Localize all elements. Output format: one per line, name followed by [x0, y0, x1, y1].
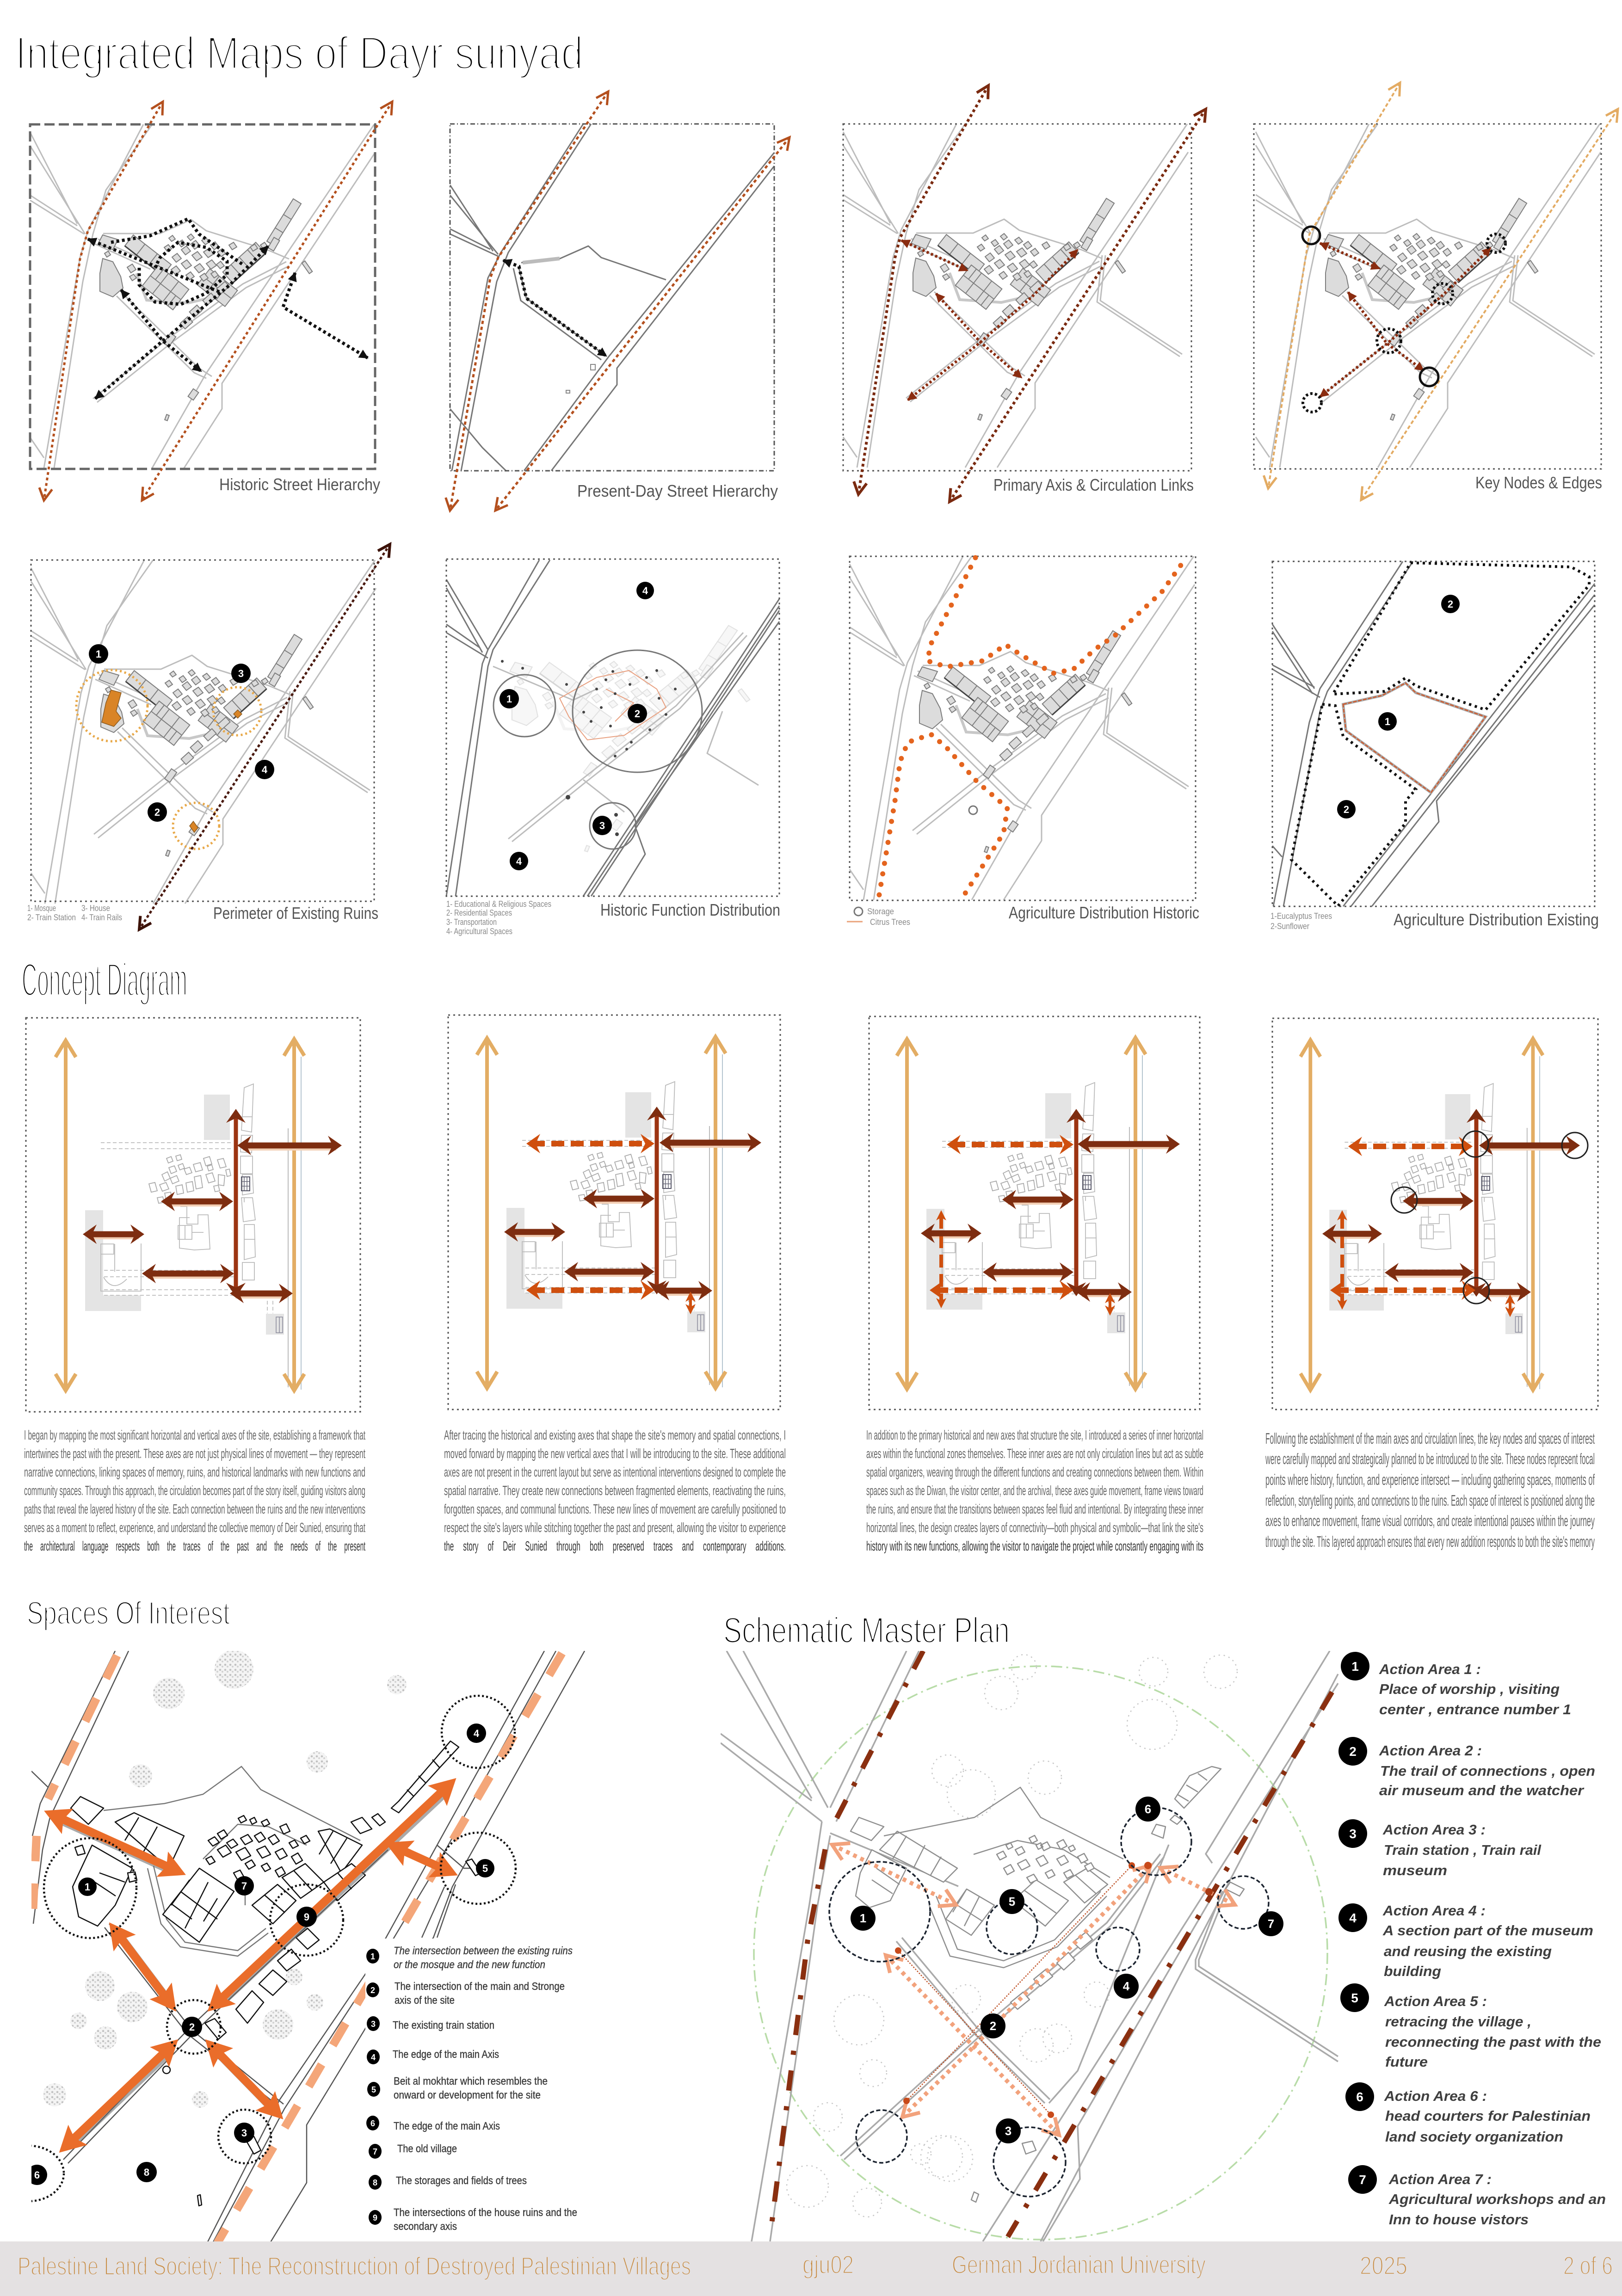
- text block: concept 4: [1265, 1430, 1595, 1550]
- roads: [31, 1651, 585, 2243]
- legend: spaces of interest: The edge of the main Axis: [394, 2120, 500, 2132]
- action area 3: Action Area 3 :: [1382, 1822, 1486, 1838]
- caption: Historic Function Distribution: [600, 900, 780, 919]
- ruins highlighted: [102, 690, 242, 832]
- buildings: [71, 1741, 481, 2206]
- legend: spaces of interest: 4: [371, 2053, 376, 2062]
- panel: schematic master plan map: [721, 1651, 1338, 2241]
- action area 3: [1338, 1819, 1542, 1878]
- action area 6: head courters for Palestinian: [1385, 2108, 1591, 2124]
- number badges: 1: [1385, 716, 1390, 727]
- panel: agriculture distribution existing: [1270, 561, 1599, 931]
- legend: action areas: [1338, 1652, 1606, 2228]
- orange rail dashes: [32, 1653, 562, 2243]
- action area 3: 3: [1349, 1827, 1357, 1841]
- text block: concept 1: I began by mapping the most significant horizontal and vertical axes of the site, establishing a framework that: [24, 1428, 365, 1443]
- circulation dotted paths: [88, 219, 368, 399]
- text block: concept 2: the story of Deir Sunied through both preserved traces and contemporary additions.: [444, 1539, 786, 1554]
- number badges: 7: [1268, 1917, 1274, 1931]
- legend: spaces of interest: 5: [371, 2085, 376, 2094]
- number badges: 6: [34, 2169, 40, 2181]
- text block: concept 1: community spaces. Through this approach, the circulation becomes part of the story itself, guiding visitors along: [24, 1483, 365, 1498]
- number badges: [89, 644, 274, 822]
- storage mark: [969, 806, 977, 814]
- number badges: 4: [1123, 1979, 1130, 1993]
- panel: concept 3: [869, 1016, 1200, 1410]
- site boundary circle: [754, 1666, 1327, 2240]
- residential dots: [501, 660, 677, 836]
- action area 6: [1345, 2082, 1591, 2145]
- text block: concept 2: After tracing the historical and existing axes that shape the site's memory and spatial connections, I: [444, 1428, 786, 1443]
- legend: spaces of interest: onward or development for the site: [394, 2089, 541, 2101]
- caption: Agriculture Distribution Historic: [1009, 903, 1199, 922]
- links: [901, 240, 1078, 400]
- text block: concept 1: serves as a moment to reflect, experience, and understand the collective memory of Deir Sunied, ensuring that: [24, 1520, 365, 1535]
- legend: spaces of interest: The intersection of the main and Stronge: [395, 1980, 565, 1992]
- number badges: 2: [154, 806, 160, 818]
- text block: concept 3: spaces such as the Diwan, the visitor center, and the archival, these axes guide movement, frame views toward: [866, 1483, 1203, 1498]
- sunflower fields: [1291, 563, 1589, 906]
- text: the architectural language respects both the traces of the past and the needs of the present: [24, 1539, 365, 1554]
- legend: 2-Sunflower: [1270, 922, 1309, 931]
- legend: 1-Eucalyptus Trees: [1270, 911, 1332, 921]
- action area 7: [1348, 2165, 1606, 2228]
- orange double arrows: [59, 1789, 444, 2142]
- salmon dotted axes: [832, 1845, 1235, 2135]
- text block: concept 2: spatial narrative. They create new connections between fragmented elements, reactivating the ruins,: [444, 1483, 786, 1498]
- number badges: 1: [860, 1911, 866, 1925]
- legend: spaces of interest: 6: [370, 2119, 375, 2128]
- action area 1: [1341, 1652, 1571, 1717]
- citrus tree dotted edges: [879, 558, 1184, 898]
- dotted link: [503, 260, 606, 356]
- action area 1: 1: [1351, 1659, 1359, 1674]
- legend: 3- House: [81, 904, 110, 913]
- new dashed axes: [935, 1145, 1068, 1303]
- action area 1: Action Area 1 :: [1379, 1661, 1481, 1677]
- legend: [1270, 911, 1332, 931]
- roads: [721, 1651, 1338, 2241]
- orange arrows shadow: [60, 1791, 446, 2144]
- tan axes: [1268, 83, 1618, 500]
- panel: concept 2: [448, 1015, 780, 1410]
- rail dash-dot lines: [770, 1651, 1332, 2237]
- legend: spaces of interest: 3: [371, 2019, 376, 2029]
- action area 4: A section part of the museum: [1382, 1922, 1593, 1939]
- action area 7: Inn to house vistors: [1389, 2211, 1529, 2228]
- footer: university: German Jordanian University: [952, 2250, 1206, 2279]
- number badges: [500, 582, 654, 870]
- text block: concept 2: respect the site's layers while stitching together the past and present, allowing the visitor to experience: [444, 1520, 786, 1535]
- legend: spaces of interest: The edge of the main Axis: [393, 2048, 499, 2060]
- text block: concept 1: paths that reveal the layered history of the site. Each connection between the ruins and the new interventions: [24, 1502, 365, 1517]
- footer: project title: Palestine Land Society: The Reconstruction of Destroyed Palestinian Villages: [18, 2252, 691, 2280]
- number badges: 1: [96, 648, 101, 660]
- number badges: 4: [642, 585, 648, 597]
- text block: concept 1: narrative connections, linking spaces of memory, ruins, and historical landmarks with new functions and: [24, 1465, 365, 1480]
- text block: concept 2: forgotten spaces, and communal functions. These new lines of movement are carefully positioned to: [444, 1502, 786, 1517]
- trees: [43, 1650, 407, 2108]
- horizontal arrows: [510, 1143, 756, 1291]
- action area 4: and reusing the existing: [1384, 1943, 1552, 1959]
- text: Concept Diagram: [22, 954, 187, 1006]
- heading: schematic master plan: Schematic Master Plan: [723, 1610, 1010, 1650]
- thin brown links with end dots: [895, 1862, 1213, 2118]
- legend: spaces of interest: The existing train station: [393, 2019, 494, 2031]
- action area 2: 2: [1349, 1744, 1357, 1759]
- legend: spaces of interest: 9: [373, 2213, 377, 2222]
- caption: Agriculture Distribution Existing: [1394, 910, 1599, 929]
- action area 5: retracing the village ,: [1385, 2013, 1531, 2030]
- function circles: [493, 650, 702, 849]
- text block: concept 3: axes within the functional zones themselves. These inner axes are not only circulation lines but act as subtle: [866, 1447, 1203, 1461]
- white legend backing: [365, 1939, 587, 2241]
- legend: [847, 907, 910, 927]
- text block: concept 3: horizontal lines, the design creates layers of connectivity—both physical and symbolic—that link the site's: [866, 1520, 1203, 1535]
- number badges: 2: [189, 2021, 195, 2033]
- horizontal arrows: [88, 1145, 336, 1293]
- main vertical arrow: [234, 1114, 238, 1291]
- main axes: [450, 92, 789, 511]
- number badges: 2: [1448, 598, 1453, 610]
- number badges: 4: [516, 856, 522, 867]
- trees: [787, 1655, 1237, 2217]
- action area 4: [1338, 1902, 1593, 1979]
- dotted circles: [0, 1696, 516, 2201]
- action area 5: reconnecting the past with the: [1385, 2034, 1601, 2050]
- footer band: [0, 2241, 1622, 2296]
- action area 2: [1338, 1737, 1595, 1798]
- legend: spaces of interest: 8: [373, 2178, 377, 2187]
- action area 7: Action Area 7 :: [1388, 2171, 1492, 2187]
- legend: spaces of interest: axis of the site: [395, 1994, 455, 2006]
- caption: Present-Day Street Hierarchy: [577, 481, 778, 500]
- links: [1320, 243, 1491, 397]
- number badges: 6: [1145, 1802, 1151, 1816]
- main vertical arrow: [655, 1112, 659, 1289]
- new dashed axes: [1336, 1146, 1470, 1304]
- legend: spaces of interest: 7: [373, 2147, 377, 2156]
- axis: [139, 544, 390, 929]
- legend: [27, 904, 122, 922]
- text block: concept 1: intertwines the past with the present. These axes are not just physical lines of movement — they represent: [24, 1447, 365, 1461]
- legend: spaces of interest: secondary axis: [394, 2220, 457, 2232]
- action area 2: Action Area 2 :: [1379, 1742, 1482, 1759]
- text block: concept 3: history with its new functions, allowing the visitor to navigate the project while constantly engaging with its: [866, 1539, 1203, 1554]
- action area 6: Action Area 6 :: [1384, 2088, 1487, 2104]
- legend: Storage: [867, 907, 894, 916]
- number badges: 5: [1009, 1895, 1015, 1908]
- caption: Key Nodes & Edges: [1475, 473, 1602, 492]
- text block: concept 3: In addition to the primary historical and new axes that structure the site, I introduced a series of inner horizontal: [866, 1428, 1203, 1443]
- number badges: 3: [1005, 2124, 1011, 2138]
- caption: Perimeter of Existing Ruins: [213, 904, 378, 923]
- number badges: 9: [304, 1911, 309, 1923]
- action area 1: center , entrance number 1: [1379, 1701, 1571, 1717]
- number badges: 5: [482, 1863, 488, 1874]
- text block: concept 2: moved forward by mapping the new vertical axes that I will be introducing to the site. These additional: [444, 1447, 786, 1461]
- panel: spaces of interest map: [0, 1650, 587, 2243]
- action area 4: Action Area 4 :: [1382, 1902, 1486, 1919]
- panel: concept 1: [26, 1018, 360, 1412]
- panel: historic function distribution: [446, 559, 780, 936]
- number badges: 2: [1344, 804, 1349, 815]
- axes: [858, 86, 1206, 502]
- action area 5: [1340, 1983, 1601, 2070]
- legend: Citrus Trees: [870, 917, 910, 927]
- action area 2: air museum and the watcher: [1379, 1782, 1585, 1798]
- number badges: [851, 1797, 1283, 2143]
- legend: 3- Transportation: [446, 917, 497, 927]
- action area circles: [829, 1808, 1269, 2197]
- number badges: 1: [506, 693, 512, 705]
- legend: spaces of interest: The intersection between the existing ruins: [394, 1945, 573, 1957]
- action area 6: 6: [1356, 2090, 1363, 2104]
- number badges: 4: [262, 764, 268, 776]
- number badges: 2: [990, 2019, 996, 2033]
- legend: 4- Train Rails: [81, 913, 122, 922]
- text block: concept 1: [24, 1428, 365, 1554]
- panel: concept 4: [1272, 1018, 1598, 1410]
- legend: 1- Educational & Religious Spaces: [446, 899, 551, 909]
- heading: spaces of interest: Spaces Of Interest: [27, 1595, 230, 1631]
- action area 5: future: [1385, 2054, 1428, 2070]
- legend: spaces of interest: Beit al mokhtar which resembles the: [394, 2075, 548, 2087]
- number badges: 8: [144, 2167, 149, 2178]
- number badges: [1337, 595, 1460, 819]
- action area 7: Agricultural workshops and an: [1388, 2191, 1606, 2207]
- nodes: [1302, 227, 1505, 412]
- number badges: 7: [241, 1880, 247, 1892]
- legend: 1- Mosque: [27, 904, 56, 913]
- number badges: 1: [85, 1881, 90, 1893]
- horizontal arrows: [1328, 1145, 1574, 1292]
- panel: present-day street hierarchy: [450, 92, 789, 511]
- text block: concept 3: the ruins, and ensure that the transitions between spaces feel fluid and intentional. By integrating these inner: [866, 1502, 1203, 1517]
- footer: group code: gju02: [802, 2250, 854, 2279]
- action area 2: The trail of connections , open: [1380, 1763, 1595, 1779]
- panel: agriculture distribution historic: [847, 556, 1199, 927]
- number badges: 3: [241, 2127, 247, 2139]
- new dashed axes: [532, 1144, 649, 1290]
- text block: concept 2: [444, 1428, 786, 1554]
- action area 5: 5: [1351, 1991, 1358, 2005]
- ruin perimeters: [76, 670, 261, 849]
- panel: historic street hierarchy: [30, 102, 392, 500]
- legend: spaces of interest: The intersections of the house ruins and the: [394, 2206, 577, 2218]
- legend: spaces of interest: 2: [370, 1986, 375, 1995]
- node circles: [1391, 1131, 1588, 1304]
- action area 3: Train station , Train rail: [1384, 1842, 1542, 1858]
- legend: spaces of interest: 1: [370, 1952, 375, 1961]
- panel: key nodes and edges: [1254, 83, 1618, 500]
- text block: concept 3: [866, 1428, 1203, 1554]
- horizontal arrows: [926, 1144, 1174, 1292]
- legend: spaces of interest: The old village: [397, 2142, 457, 2154]
- text block: concept 2: axes are not present in the current layout but serve as intentional interventions designed to complete the: [444, 1465, 786, 1480]
- main vertical arrow: [1474, 1114, 1478, 1291]
- action area 7: 7: [1359, 2173, 1366, 2187]
- number badges: [27, 1724, 494, 2185]
- legend: 2- Train Station: [27, 913, 76, 922]
- action area 1: Place of worship , visiting: [1379, 1681, 1560, 1697]
- village: [851, 1767, 1244, 2202]
- main axes: [44, 102, 392, 500]
- panel: primary axis and circulation links: [843, 86, 1206, 502]
- action area 3: museum: [1383, 1862, 1447, 1878]
- legend: 2- Residential Spaces: [446, 908, 512, 917]
- legend: spaces of interest: or the mosque and the new function: [394, 1958, 545, 1970]
- number badges: 2: [635, 708, 640, 720]
- eucalyptus field: [1343, 683, 1486, 793]
- number badges: 3: [238, 668, 244, 679]
- panel: perimeter of existing ruins: [27, 544, 390, 929]
- legend: 4- Agricultural Spaces: [446, 927, 512, 936]
- action area 4: 4: [1349, 1911, 1357, 1925]
- legend: spaces of interest: The storages and fields of trees: [396, 2174, 527, 2186]
- main vertical arrow: [1074, 1114, 1079, 1291]
- caption: Historic Street Hierarchy: [219, 475, 380, 494]
- legend: [446, 899, 551, 936]
- action area 5: Action Area 5 :: [1384, 1993, 1487, 2009]
- title: Integrated Maps of Dayr sunyad: [15, 27, 583, 79]
- text block: concept 3: spatial organizers, weaving through the different functions and creating connections between them. Within: [866, 1465, 1203, 1480]
- footer: year: 2025: [1360, 2251, 1407, 2280]
- number badges: 4: [474, 1728, 480, 1739]
- action area 4: building: [1384, 1963, 1441, 1979]
- number badges: 3: [599, 820, 605, 831]
- legend: spaces of interest: [366, 1945, 577, 2232]
- caption: Primary Axis & Circulation Links: [993, 475, 1194, 494]
- action area 6: land society organization: [1385, 2129, 1563, 2145]
